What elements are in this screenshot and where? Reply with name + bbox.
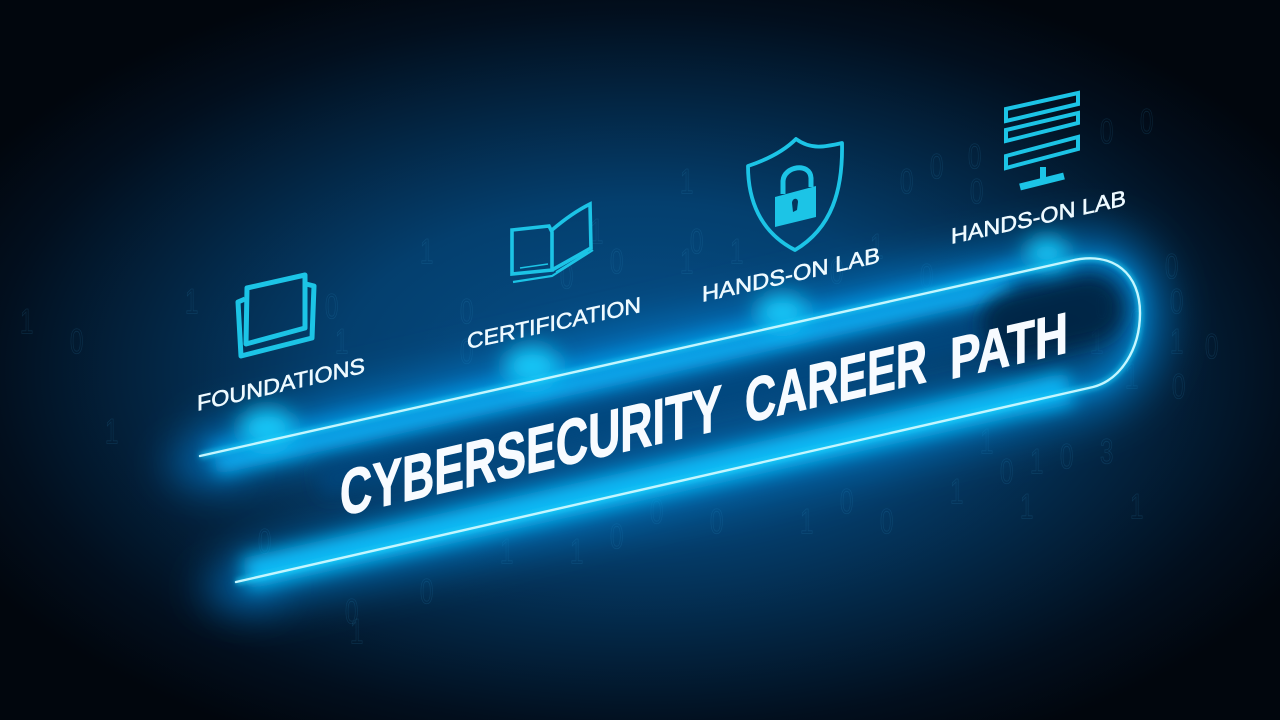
binary digit pattern: 1 <box>680 243 693 282</box>
binary digit pattern: 0 <box>1100 113 1113 152</box>
neon path outline <box>200 258 1140 582</box>
step 2: certification <box>467 204 641 354</box>
binary digit pattern: 1 <box>680 163 693 202</box>
binary digit pattern: 0 <box>710 503 723 542</box>
binary digit pattern: 3 <box>1100 433 1113 472</box>
mid glow above top line <box>210 266 1030 450</box>
binary digit pattern: 1 <box>730 233 743 272</box>
binary digit pattern: 0 <box>610 243 623 282</box>
binary digit pattern: 1 <box>185 283 198 322</box>
binary digit pattern: 0 <box>1095 288 1108 327</box>
icon: server rack <box>1006 93 1078 187</box>
binary digit pattern: 0 <box>460 293 473 332</box>
curve glow <box>1000 258 1140 403</box>
label: hands-on lab: HANDS-ON LAB <box>951 185 1126 249</box>
binary digit pattern: 0 <box>650 493 663 532</box>
binary digit pattern: 0 <box>880 503 893 542</box>
binary digit pattern: 1 <box>500 533 513 572</box>
wide soft halo <box>200 258 1140 582</box>
binary digit pattern: 1 <box>420 233 433 272</box>
binary digit pattern: 1 <box>980 423 993 462</box>
binary digit pattern: 0 <box>840 483 853 522</box>
binary digit pattern: 0 <box>258 523 271 562</box>
binary digit pattern: 0 <box>830 253 843 292</box>
binary digit pattern: 1 <box>1125 358 1138 397</box>
title: PATH <box>950 301 1068 392</box>
glow band around the path <box>165 258 1140 606</box>
binary digit pattern: 0 <box>70 323 83 362</box>
binary digit pattern: 1 <box>105 413 118 452</box>
glow hotspots <box>239 237 1069 448</box>
binary digit pattern: 1 <box>350 613 363 652</box>
binary digit pattern: 0 <box>1205 328 1218 367</box>
left end halo bottom <box>200 570 280 606</box>
mid glow under top line <box>215 285 1010 463</box>
binary digit pattern: 0 <box>920 258 933 297</box>
binary digit pattern: 1 <box>1030 443 1043 482</box>
binary digit pattern: 1 <box>870 228 883 267</box>
binary digit pattern: 0 <box>420 573 433 612</box>
binary digit pattern: 0 <box>610 518 623 557</box>
binary digit pattern: 0 <box>968 138 981 177</box>
binary digit pattern: 0 <box>1060 438 1073 477</box>
binary digit pattern: 1 <box>950 473 963 512</box>
binary digit pattern: 1 <box>1020 488 1033 527</box>
binary digit pattern: 1 <box>1130 488 1143 527</box>
title: CYBERSECURITY <box>340 371 722 530</box>
binary digit pattern <box>20 103 1218 652</box>
binary digit pattern: 1 <box>1170 323 1183 362</box>
label: certification: CERTIFICATION <box>467 292 641 354</box>
binary digit pattern: 1 <box>335 323 348 362</box>
binary digit pattern: 0 <box>460 333 473 372</box>
binary digit pattern: 0 <box>1170 283 1183 322</box>
icon: shield with padlock <box>748 139 842 250</box>
dark core behind the title <box>320 326 1010 482</box>
binary digit pattern: 0 <box>560 258 573 297</box>
binary digit pattern: 0 <box>970 173 983 212</box>
binary digit pattern: 0 <box>325 288 338 327</box>
binary digit pattern: 1 <box>800 503 813 542</box>
binary digit pattern: 1 <box>1090 323 1103 362</box>
binary digit pattern: 0 <box>690 223 703 262</box>
binary digit pattern: 0 <box>1172 368 1185 407</box>
binary digit pattern: 0 <box>900 163 913 202</box>
binary digit pattern: 1 <box>570 533 583 572</box>
mid glow around bottom line <box>245 388 1070 574</box>
binary digit pattern: 0 <box>1140 103 1153 142</box>
dark core inside the rounded end <box>1015 308 1090 325</box>
binary digit pattern: 1 <box>20 303 33 342</box>
binary digit pattern: 0 <box>1000 453 1013 492</box>
icon: stacked book <box>238 275 314 356</box>
label: hands-on lab: HANDS-ON LAB <box>702 242 880 307</box>
label: foundations: FOUNDATIONS <box>197 353 365 416</box>
icon: open book <box>512 204 593 282</box>
step 1: foundations <box>197 275 365 416</box>
binary digit pattern: 0 <box>930 148 943 187</box>
binary digit pattern: 0 <box>345 593 358 632</box>
binary digit pattern: 1 <box>590 213 603 252</box>
step 3: hands-on lab with shield <box>702 139 880 307</box>
binary digit pattern: 0 <box>1130 303 1143 342</box>
title <box>340 301 1068 530</box>
binary digit pattern: 0 <box>1165 248 1178 287</box>
left end halo top <box>165 446 245 482</box>
title: CAREER <box>745 326 927 437</box>
step 4: hands-on lab with server <box>951 93 1126 249</box>
